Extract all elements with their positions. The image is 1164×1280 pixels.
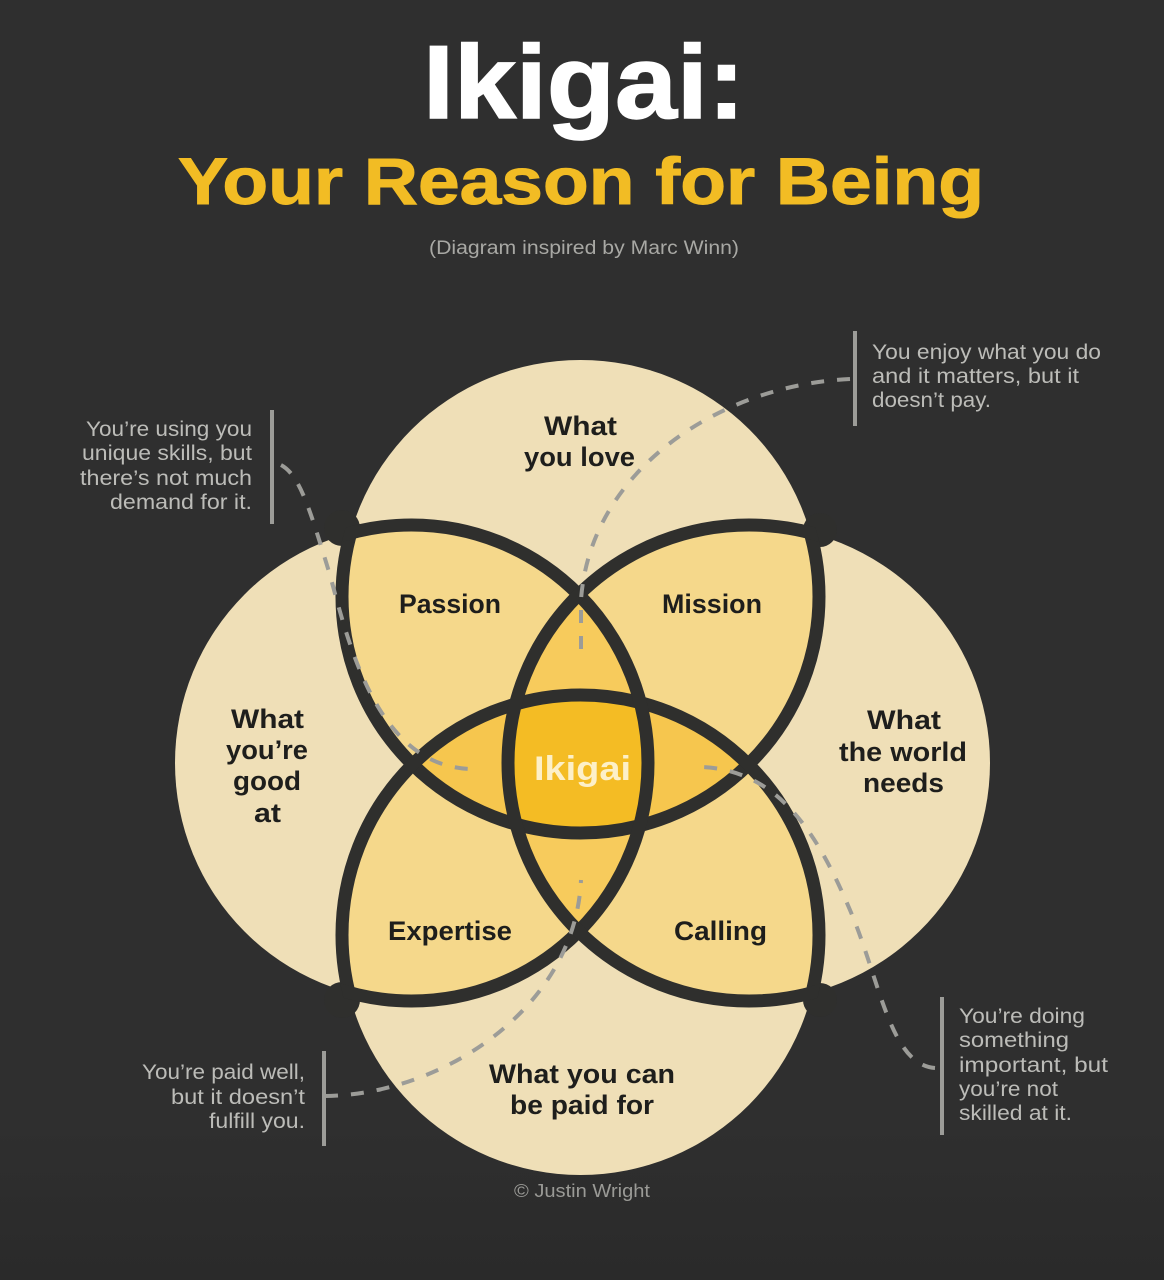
label: mission: Mission [662,589,762,619]
callout text: unique skills, but [82,442,252,465]
triple overlap: horizontal lens [422,712,739,816]
callout bar [322,1051,326,1146]
triple overlap: vertical lens [525,604,631,922]
dashed connector: passion gap [281,465,475,769]
callout text: You’re using you [86,418,252,441]
dashed connector: calling gap [693,767,935,1068]
callout bar [853,331,857,426]
overlap: mission [588,532,812,756]
callout text: You enjoy what you do [872,341,1101,364]
label: what you can be paid for: What you can [489,1059,675,1089]
dashed connector: mission gap [581,379,850,660]
outline: bottom circle [336,688,826,988]
callout text [959,1005,1108,1125]
label: what the world needs: the world [839,737,967,767]
circle: what the world needs [508,525,990,1001]
label: what you love: What [544,411,617,441]
circle: what you can be paid for [342,695,819,1175]
callout text: demand for it. [110,491,252,514]
outline: right circle [502,518,807,1008]
label: what you love [524,411,635,472]
callout text: You’re doing [959,1005,1085,1028]
callout: top left [80,410,274,524]
callout bar [270,410,274,524]
centre overlap: ikigai [514,702,642,826]
circle: what you're good at [175,525,648,1001]
outline: top circle [336,524,826,840]
label: what the world needs: What [867,705,941,735]
label: what you're good at [226,704,308,828]
label: what you're good at: What [231,704,304,734]
callout text: there’s not much [80,467,252,490]
attribution note: (Diagram inspired by Marc Winn) [429,238,739,259]
callout: top right [853,331,1101,426]
overlap: calling [588,774,812,994]
callout text: You’re paid well, [142,1061,305,1084]
callout text: you’re not [959,1078,1058,1101]
label: what you can be paid for [489,1059,675,1120]
label: what you're good at: you’re [226,735,308,765]
label: what the world needs: needs [863,768,944,798]
callout text: and it matters, but it [872,365,1079,388]
label: ikigai: Ikigai [534,750,631,788]
callout text [872,341,1101,412]
circle: what you love [342,360,819,833]
callout bar [940,997,944,1135]
callout text: fulfill you. [209,1110,305,1133]
callout text: something [959,1029,1069,1052]
label: expertise: Expertise [388,916,512,946]
label: what you're good at: good [233,766,301,796]
dashed connector: expertise gap [325,880,581,1096]
callout text: doesn’t pay. [872,389,991,412]
callout text: but it doesn’t [171,1086,305,1109]
label: calling: Calling [674,916,767,946]
subtitle heading: Your Reason for Being [178,144,984,218]
label: what you're good at: at [254,798,281,828]
label: what the world needs [839,705,967,798]
outline: left circle [354,518,654,1008]
label: passion: Passion [399,589,501,619]
overlap: passion [348,532,570,756]
venn diagram [175,360,990,1175]
callout text [80,418,252,514]
callout text: skilled at it. [959,1102,1072,1125]
title: Ikigai: [423,25,745,141]
label: what you love: you love [524,442,635,472]
callout text: important, but [959,1054,1108,1077]
footer credit: © Justin Wright [514,1181,650,1201]
callout: bottom left [142,1051,326,1146]
callout: bottom right [940,997,1108,1135]
overlap: expertise [348,774,570,994]
callout text [142,1061,305,1133]
corner joins where the outlines meet the background [324,510,837,1018]
label: what you can be paid for: be paid for [510,1090,655,1120]
